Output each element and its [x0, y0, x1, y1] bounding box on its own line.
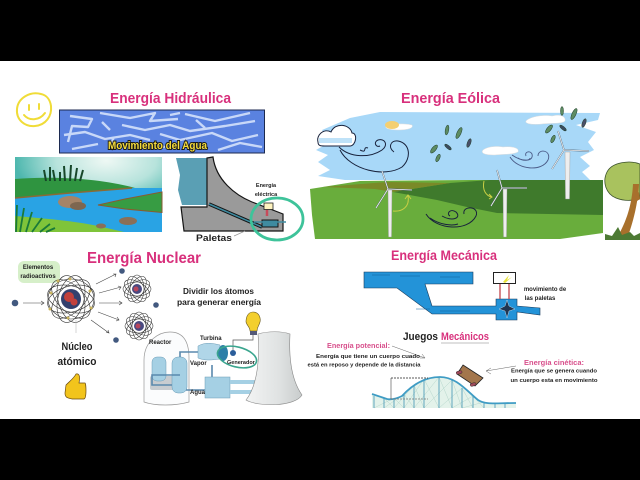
illustration: dam cross-section: eléctrica [255, 192, 278, 198]
rotation arrows [393, 181, 492, 211]
text: Dividir los átomos: Dividir los átomos [183, 287, 255, 296]
sky [316, 112, 600, 180]
generator box [264, 203, 273, 210]
clouds [386, 115, 565, 155]
diagram: atomic fission [12, 268, 159, 343]
illustration: roller coaster [372, 365, 516, 408]
reactor dome [144, 332, 189, 405]
text: Energía cinética: Energía que se genera cuando [511, 368, 597, 374]
heat exchanger [205, 377, 230, 398]
wind turbine 2 [491, 170, 527, 237]
sun [385, 121, 399, 129]
label: movimiento de las paletas: las paletas [525, 296, 556, 302]
generator ring [215, 342, 259, 372]
diagram: water channel and turbine [364, 272, 567, 320]
cooling tower [246, 332, 302, 405]
label: Núcleo atómico [58, 341, 97, 368]
label: Elementos radioactivos [18, 261, 60, 283]
neutrons [12, 268, 159, 343]
text: Dividir los átomos: para generar energía [177, 298, 262, 307]
illustration: tree [605, 162, 640, 240]
turbine [198, 343, 220, 360]
panel: energía eólica [310, 90, 640, 240]
main atom [44, 272, 98, 326]
heading: Juegos Mecánicos: Juegos [403, 331, 438, 343]
highlight ring [251, 198, 303, 240]
heading: Energía Hidráulica: Energía Hidráulica [110, 90, 232, 107]
label: Movimiento del Agua: Movimiento del Agua [108, 140, 208, 152]
heading: Juegos Mecánicos [403, 331, 489, 343]
plant labels [149, 336, 256, 396]
text: Energía potencial: Energía que tiene un cuerpo cuado [316, 354, 420, 360]
label: movimiento de las paletas [524, 287, 567, 302]
leaves [429, 106, 587, 162]
pipes [152, 352, 212, 390]
plant labels: Turbina [200, 336, 222, 342]
roller coaster car [456, 365, 483, 387]
label: Paletas: Paletas [196, 233, 232, 244]
plant labels: Reactor [149, 340, 172, 346]
diagram: nuclear plant [144, 332, 302, 405]
panel: energía mecánica [308, 247, 598, 408]
wind swirls [339, 140, 477, 227]
label: movimiento de las paletas: movimiento de [524, 287, 567, 293]
child atoms [121, 273, 155, 342]
icon: thumbs up [65, 374, 86, 399]
heading: Juegos Mecánicos: Mecánicos [441, 331, 489, 343]
panel: energía hidráulica [15, 90, 303, 244]
page background [0, 61, 640, 419]
cloud outline [318, 125, 356, 146]
icon: light bulb [246, 312, 260, 335]
illustration: wind farm [310, 106, 603, 239]
arrows [23, 274, 122, 333]
illustration: dam cross-section [176, 157, 303, 244]
label: Núcleo atómico: atómico [58, 356, 97, 368]
text: Energía cinética: un cuerpo esta en movimiento [510, 378, 598, 384]
panel: energía nuclear [12, 250, 302, 405]
heading: Energía Mecánica: Energía Mecánica [391, 247, 497, 263]
plant labels: Generador [227, 360, 256, 366]
text: Energía cinética [486, 358, 598, 384]
plant labels: Vapor [190, 361, 207, 367]
text: Dividir los átomos [177, 287, 262, 307]
text: Energía cinética: Energía cinética: [524, 358, 584, 367]
text: Energía potencial: está en reposo y depende de la distancia [308, 362, 421, 368]
wind turbine 1 [376, 171, 412, 237]
label: Elementos radioactivos: radioactivos [20, 274, 56, 280]
plant labels: Agua [190, 390, 206, 396]
heading: Energía Nuclear: Energía Nuclear [87, 250, 201, 267]
hills [310, 180, 603, 239]
label: Núcleo atómico: Núcleo [62, 341, 93, 353]
label: Energía eléctrica: Energía [256, 183, 277, 189]
illustration: river landscape [15, 157, 162, 232]
text: Energía potencial [308, 341, 425, 368]
label: Elementos radioactivos: Elementos [23, 265, 54, 271]
generator box [494, 272, 516, 284]
text: Energía potencial: Energía potencial: [327, 341, 390, 350]
wind turbine 3 [552, 131, 589, 199]
heading: Energía Eólica: Energía Eólica [401, 90, 501, 107]
icon: smiley [17, 93, 51, 126]
water banner [60, 110, 264, 153]
